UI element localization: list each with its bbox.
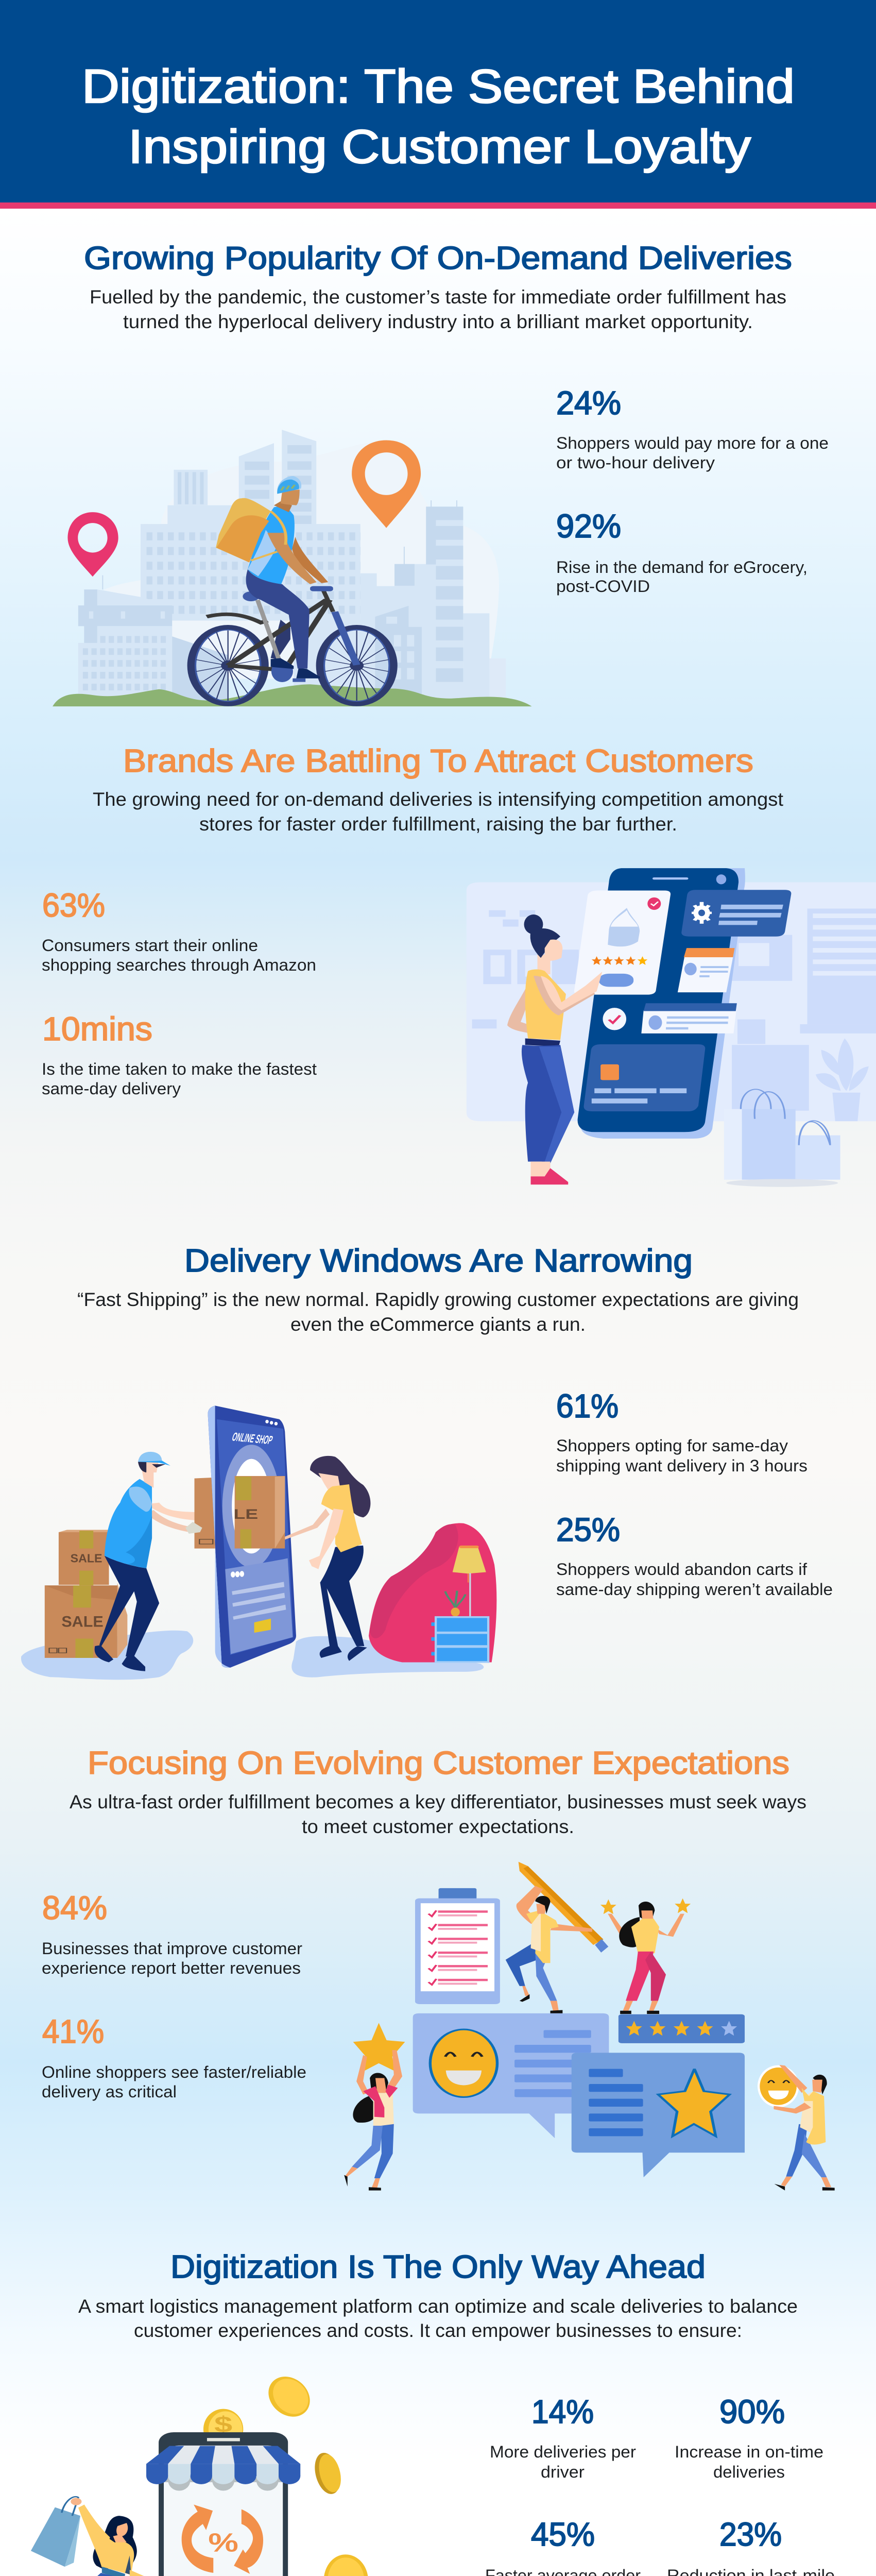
intro text: Fuelled by the pandemic, the customer’s taste for immediate order fulfillment has <box>90 286 786 308</box>
intro text <box>77 1289 799 1335</box>
stat: 84%: experience report better revenues <box>42 1959 301 1977</box>
intro text <box>70 1791 806 1837</box>
stat: 61% <box>556 1387 808 1475</box>
stat: 25% <box>556 1511 833 1599</box>
stat: 24%: Shoppers would pay more for a one <box>556 434 829 452</box>
illustration: courier handing parcel through tablet to shopper: ONLINE SHOP <box>230 1431 274 1447</box>
illustration: cyclist courier in the city <box>53 430 532 706</box>
stat: 84%: Businesses that improve customer <box>42 1939 302 1958</box>
stat: 14%: 14% <box>531 2393 594 2430</box>
stat: 14% <box>490 2393 636 2481</box>
heading: Growing Popularity Of On-Demand Deliveries <box>84 241 792 276</box>
stat: 63%: shopping searches through Amazon <box>42 956 316 974</box>
intro text: The growing need for on-demand deliveries is intensifying competition amongst <box>93 789 784 810</box>
icon: orange location pin <box>352 440 421 528</box>
header banner <box>0 0 876 209</box>
stat: 45% <box>485 2516 641 2576</box>
panel: brands are battling to attract customers <box>42 743 876 1187</box>
illustration: customers rating and reviewing <box>344 1862 835 2191</box>
panel: growing popularity of on-demand deliveries <box>53 241 829 706</box>
intro text: even the eCommerce giants a run. <box>290 1314 586 1335</box>
stat: 41%: delivery as critical <box>42 2082 177 2101</box>
stat: 63%: 63% <box>42 887 105 924</box>
intro text <box>78 2296 798 2341</box>
intro text: customer experiences and costs. It can empower businesses to ensure: <box>134 2320 742 2341</box>
stat: 90%: Increase in on-time <box>675 2443 823 2461</box>
stat: 90%: 90% <box>719 2393 785 2430</box>
stat: 45%: 45% <box>531 2516 595 2553</box>
panel: digitization is the only way ahead <box>16 2249 835 2576</box>
title: Digitization: The Secret Behind <box>82 60 795 113</box>
heading: Brands Are Battling To Attract Customers <box>123 743 753 779</box>
illustration: woman using shopping app on phone <box>467 868 876 1187</box>
box label: SALE <box>71 1552 102 1565</box>
stat: 10mins: same-day delivery <box>42 1079 181 1098</box>
stat: 23% <box>667 2516 835 2576</box>
intro text: “Fast Shipping” is the new normal. Rapidly growing customer expectations are giving <box>77 1289 799 1310</box>
stat: 14%: More deliveries per <box>490 2443 636 2461</box>
stat: 90%: deliveries <box>713 2463 785 2481</box>
icon: pink location pin <box>67 512 118 577</box>
intro text <box>93 789 784 835</box>
title: Inspiring Customer Loyalty <box>128 121 751 173</box>
stat: 84% <box>42 1889 302 1977</box>
stat: 25%: 25% <box>556 1511 620 1548</box>
stat: 10mins: Is the time taken to make the fastest <box>42 1060 317 1078</box>
stat: 25%: same-day shipping weren’t available <box>556 1580 833 1599</box>
panel: focusing on evolving customer expectations <box>42 1745 835 2191</box>
illustration: shopper, phone storefront and delivery truck <box>16 2374 477 2576</box>
stat: 92%: 92% <box>556 507 621 545</box>
stat: 41%: Online shoppers see faster/reliable <box>42 2063 306 2081</box>
intro text: As ultra-fast order fulfillment becomes a key differentiator, businesses must seek ways <box>70 1791 806 1812</box>
stat: 41% <box>42 2013 306 2101</box>
illustration: courier handing parcel through tablet to shopper <box>21 1405 496 1680</box>
stat: 61%: 61% <box>556 1387 619 1425</box>
intro text: stores for faster order fulfillment, raising the bar further. <box>199 814 677 835</box>
percent sign: % <box>208 2528 238 2557</box>
stat: 10mins: 10mins <box>42 1010 152 1047</box>
stat: 24%: or two-hour delivery <box>556 453 715 472</box>
stat: 92%: Rise in the demand for eGrocery, <box>556 558 808 577</box>
stat: 23%: 23% <box>719 2516 782 2553</box>
heading: Focusing On Evolving Customer Expectations <box>88 1745 789 1781</box>
stat: 61%: Shoppers opting for same-day <box>556 1436 788 1455</box>
stat: 14%: driver <box>541 2463 585 2481</box>
stat: 25%: Shoppers would abandon carts if <box>556 1560 807 1579</box>
heading: Digitization Is The Only Way Ahead <box>170 2249 706 2285</box>
stat: 92%: post-COVID <box>556 577 650 596</box>
stat: 63% <box>42 887 316 974</box>
stat: 24% <box>556 384 829 472</box>
heading: Delivery Windows Are Narrowing <box>184 1243 693 1279</box>
box label: LE <box>233 1507 258 1522</box>
stat: 90% <box>675 2393 823 2481</box>
title <box>82 60 795 173</box>
stat: 61%: shipping want delivery in 3 hours <box>556 1456 808 1475</box>
box label: SALE <box>61 1613 104 1630</box>
intro text <box>90 286 786 332</box>
illustration: shopper, phone storefront and delivery truck: $ <box>214 2412 232 2437</box>
stat: 24%: 24% <box>556 384 621 421</box>
stat: 84%: 84% <box>42 1889 107 1926</box>
stat: 41%: 41% <box>42 2013 104 2050</box>
stat: 92% <box>556 507 808 596</box>
stat: 63%: Consumers start their online <box>42 936 258 955</box>
stat: 10mins <box>42 1010 317 1098</box>
panel: delivery windows are narrowing <box>21 1243 833 1680</box>
intro text: turned the hyperlocal delivery industry into a brilliant market opportunity. <box>123 311 753 332</box>
intro text: A smart logistics management platform can optimize and scale deliveries to balance <box>78 2296 798 2317</box>
intro text: to meet customer expectations. <box>302 1816 574 1837</box>
